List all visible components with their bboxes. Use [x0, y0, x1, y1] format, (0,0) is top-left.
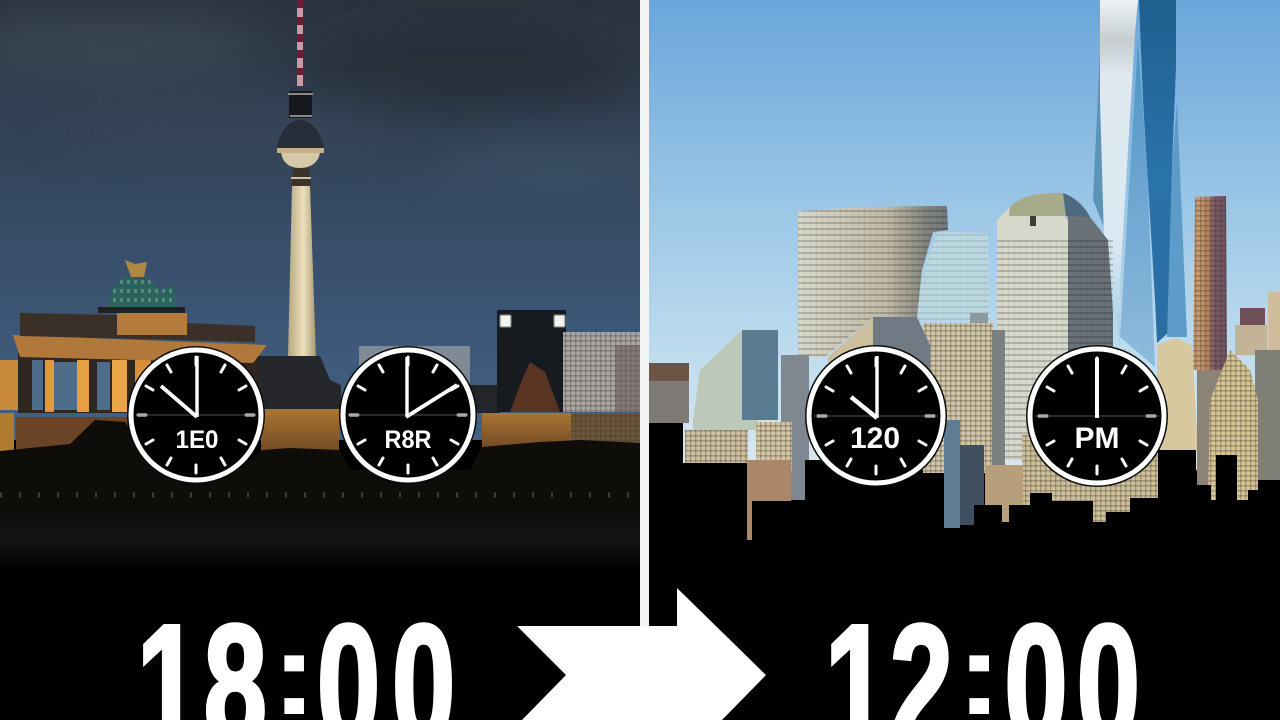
panel: Berlin at dusk	[0, 0, 680, 570]
right cluster buildings	[944, 292, 1280, 530]
glass spire tower	[1093, 0, 1187, 367]
pale glass building	[918, 232, 990, 323]
divider line	[640, 0, 649, 640]
trees and ground	[0, 420, 640, 570]
clock: first right: 120	[850, 422, 900, 455]
time label: 12:00	[831, 622, 1137, 720]
clock: second right	[1026, 345, 1168, 487]
panel: bottom black band	[0, 570, 640, 720]
dusk sky	[0, 0, 680, 440]
clock: 18:00 style left	[127, 346, 265, 484]
dome building	[997, 193, 1113, 460]
TV tower	[277, 0, 324, 358]
divider lower segment	[640, 560, 649, 630]
black skyline silhouette	[649, 423, 1280, 720]
panel: skyline at midday	[649, 0, 1280, 720]
clock: second left: R8R	[384, 426, 432, 454]
clock: 18:00 style left: 1E0	[176, 426, 218, 454]
clock: first right	[805, 345, 947, 487]
clock: second right: PM	[1074, 422, 1120, 455]
clock: second left	[339, 346, 477, 484]
time label: 18:00	[143, 622, 452, 720]
left cluster buildings	[649, 330, 809, 540]
arrow	[517, 588, 766, 720]
mid cream tower	[828, 313, 1005, 473]
day sky	[649, 0, 1280, 470]
city backdrop buildings	[249, 310, 640, 451]
Brandenburg Gate	[0, 260, 267, 453]
round banded building	[798, 206, 948, 357]
gold tower	[1193, 196, 1227, 370]
